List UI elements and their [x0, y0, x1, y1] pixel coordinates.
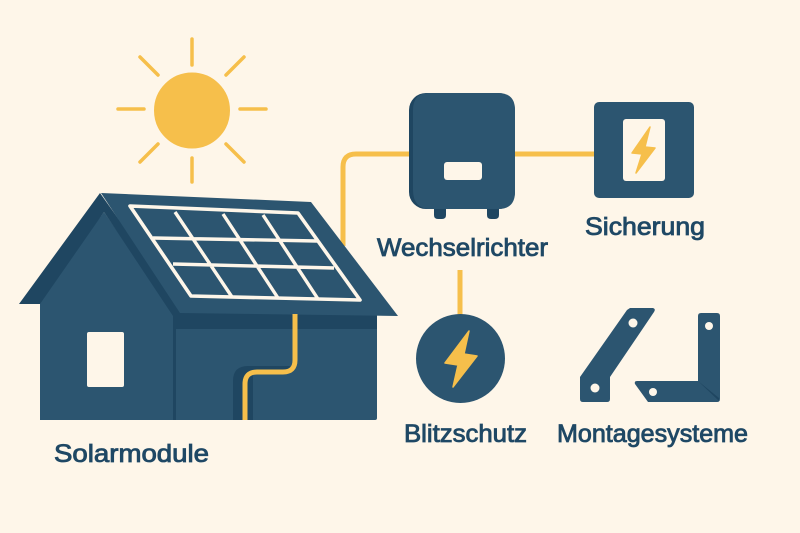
window: [87, 332, 124, 387]
icon: fuse: [594, 102, 694, 198]
cable shadow: [233, 366, 290, 420]
wire: roof to inverter: [343, 154, 410, 246]
inverter display: [444, 162, 482, 180]
icon: inverter: [409, 93, 515, 219]
wire: inverter to lightning protection: [458, 270, 462, 316]
main roof: [101, 193, 398, 316]
icon: mounting brackets: [580, 308, 720, 402]
gable roof edge: [19, 193, 180, 316]
house walls: [40, 212, 377, 420]
icon: sun: [118, 39, 266, 182]
wire: inverter to fuse: [514, 152, 596, 156]
label: Blitzschutz: Blitzschutz: [404, 420, 527, 448]
inverter feet: [434, 205, 499, 219]
icon: lightning protection: [416, 314, 505, 403]
label: Sicherung: Sicherung: [585, 213, 705, 241]
right bracket: [635, 313, 720, 402]
left bracket: [580, 308, 655, 402]
eave shadow: [175, 312, 377, 329]
house cable: [245, 314, 295, 420]
solar panel: [130, 206, 360, 300]
label: Solarmodule: Solarmodule: [54, 440, 209, 468]
label: Montagesysteme: Montagesysteme: [557, 420, 748, 448]
wall corner line: [173, 314, 176, 420]
inverter body: [409, 93, 515, 209]
label: Wechselrichter: Wechselrichter: [377, 234, 548, 262]
house with solar modules: [19, 193, 398, 420]
